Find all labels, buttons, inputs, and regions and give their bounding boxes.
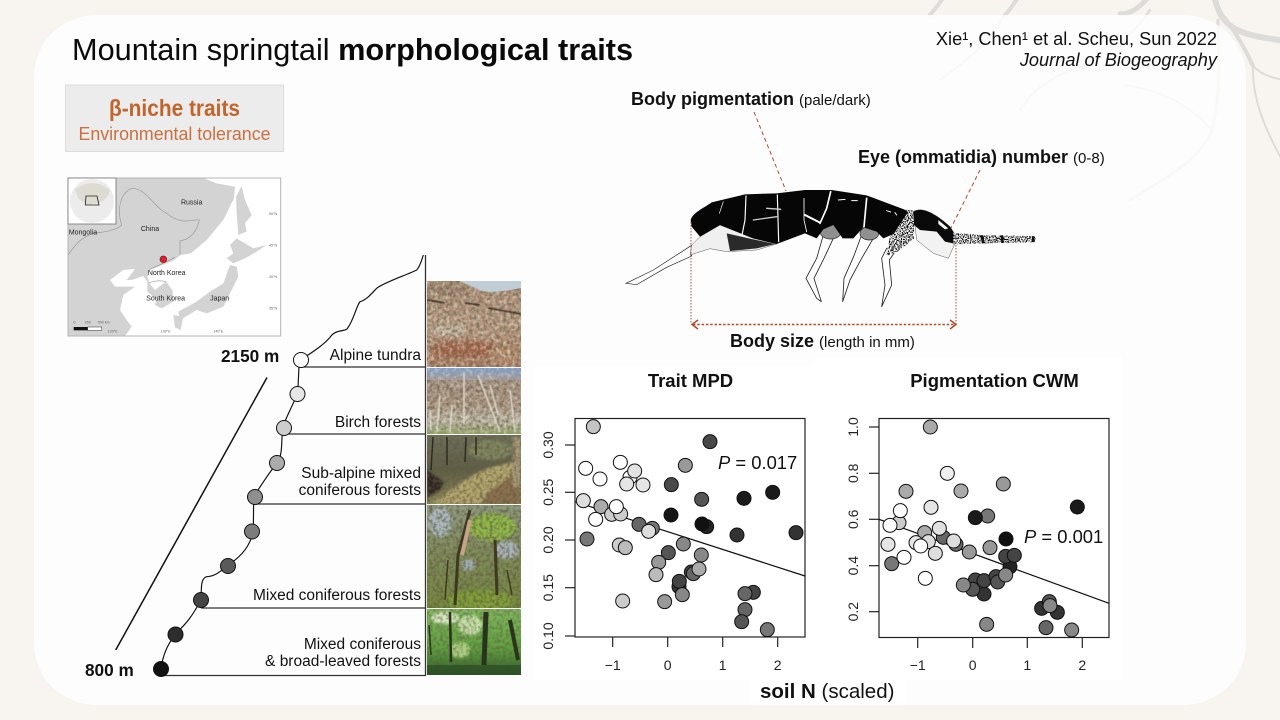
x axis: [605, 637, 782, 673]
antenna: [953, 233, 1036, 244]
data points: [576, 420, 803, 637]
regression line: [575, 502, 805, 576]
label: eye number: Eye (ommatidia) number (0-8): [858, 147, 1105, 167]
photo: mixed coniferous forest: [427, 505, 521, 610]
head: [913, 210, 954, 258]
springtail illustration: [626, 190, 1036, 307]
y axis: 0.25: [540, 478, 556, 506]
body size measurement arrow: [691, 222, 956, 329]
label: body pigmentation: Body pigmentation (pale/dark): [631, 89, 871, 109]
y axis: 0.4: [845, 556, 861, 575]
elevation gradient diagram: [85, 255, 426, 680]
annotation: body pigmentation line: [754, 112, 786, 191]
regression line: [879, 519, 1109, 603]
location map: [68, 178, 281, 336]
y axis: 0.2: [845, 602, 861, 621]
map grid labels: 250: [85, 320, 91, 324]
map grid labels: 50°N: [269, 212, 278, 216]
y axis: 0.20: [540, 526, 556, 554]
map grid labels: 0: [73, 320, 75, 324]
elevation labels: 2150 m: [221, 346, 279, 366]
y axis: [845, 417, 879, 621]
y axis: 0.8: [845, 463, 861, 483]
title: Mountain springtail morphological traits: [72, 32, 633, 67]
chart heading: Trait MPD: [648, 370, 733, 391]
photo: alpine tundra: [425, 281, 521, 367]
P value: P = 0.017: [718, 452, 797, 473]
map labels: North Korea: [148, 270, 186, 277]
forest type labels: coniferous forests: [299, 482, 421, 499]
x axis: 0: [969, 657, 977, 673]
elevation labels: 800 m: [85, 660, 134, 680]
photo: broad-leaved forest: [427, 609, 521, 675]
map grid labels: [73, 212, 278, 334]
mountain ridge line: [161, 255, 423, 669]
citation: Journal of Biogeography: [1019, 50, 1219, 70]
map labels: Russia: [181, 199, 202, 206]
x axis: [910, 638, 1086, 673]
data points: [881, 420, 1084, 637]
x axis: −1: [605, 657, 621, 673]
map grid labels: 35°N: [269, 306, 278, 310]
chart: Pigmentation CWM: [845, 370, 1109, 673]
trait category box: [66, 85, 284, 152]
antenna bands: [982, 235, 1033, 243]
x axis: 1: [719, 657, 727, 673]
annotation: eye line: [951, 170, 980, 228]
map labels: [69, 199, 229, 302]
photo: sub-alpine forest: [427, 435, 521, 504]
map grid labels: 130°E: [161, 330, 171, 334]
map grid labels: 140°E: [213, 330, 224, 334]
map inset globe: [68, 178, 116, 224]
elevation labels: [85, 346, 279, 680]
map grid labels: 40°N: [269, 275, 278, 279]
x axis: 1: [1023, 657, 1031, 673]
shared x axis label: soil N (scaled): [760, 680, 894, 703]
trait category box: β-niche traits: [109, 95, 240, 121]
chart: Trait MPD: [540, 370, 805, 673]
study site marker: [160, 256, 167, 263]
lower abdomen: [690, 225, 777, 255]
thorax: [886, 209, 914, 256]
forest type labels: Mixed coniferous forests: [253, 587, 421, 604]
forest type labels: [253, 347, 421, 670]
forest type labels: & broad-leaved forests: [265, 653, 421, 670]
map labels: China: [141, 226, 159, 233]
y axis: 0.10: [540, 622, 556, 650]
map grid labels: 500 km: [98, 320, 110, 324]
plot frame: [879, 418, 1109, 638]
map labels: Japan: [210, 295, 229, 302]
y axis: 0.15: [540, 574, 556, 601]
plot frame: [575, 418, 805, 637]
y axis: 1.0: [845, 417, 861, 437]
citation: [936, 29, 1219, 70]
chart heading: Pigmentation CWM: [910, 370, 1079, 391]
furca: [626, 245, 692, 285]
map scale bar: [74, 327, 102, 330]
body segment marks: [719, 192, 897, 242]
citation: Xie¹, Chen¹ et al. Scheu, Sun 2022: [936, 29, 1217, 49]
forest type labels: Mixed coniferous: [304, 636, 421, 653]
leg joints: [820, 224, 879, 240]
elevation sites: [154, 352, 308, 676]
y axis: 0.6: [845, 509, 861, 529]
elevation frame lines: [161, 255, 426, 676]
forest type labels: Sub-alpine mixed: [301, 465, 421, 482]
label: body size: Body size (length in mm): [730, 331, 915, 351]
map labels: Mongolia: [69, 230, 97, 237]
x axis: −1: [910, 657, 926, 673]
chart backing panels: [535, 358, 1122, 705]
photo: birch forest: [427, 368, 521, 434]
map grid labels: 45°N: [269, 244, 278, 248]
legs: [806, 235, 895, 307]
map grid labels: 120°E: [108, 330, 118, 334]
body: [691, 190, 908, 244]
map labels: South Korea: [146, 295, 185, 302]
forest type labels: Alpine tundra: [330, 347, 421, 364]
x axis: 2: [774, 657, 782, 673]
elevation arrow line: [116, 378, 267, 650]
x axis: 0: [664, 657, 672, 673]
forest type labels: Birch forests: [335, 414, 421, 431]
y axis: [540, 431, 575, 650]
x axis: 2: [1078, 657, 1086, 673]
P value: P = 0.001: [1024, 526, 1103, 547]
trait category box: Environmental tolerance: [78, 123, 270, 144]
background roots: [930, 0, 1280, 200]
y axis: 0.30: [540, 431, 556, 459]
